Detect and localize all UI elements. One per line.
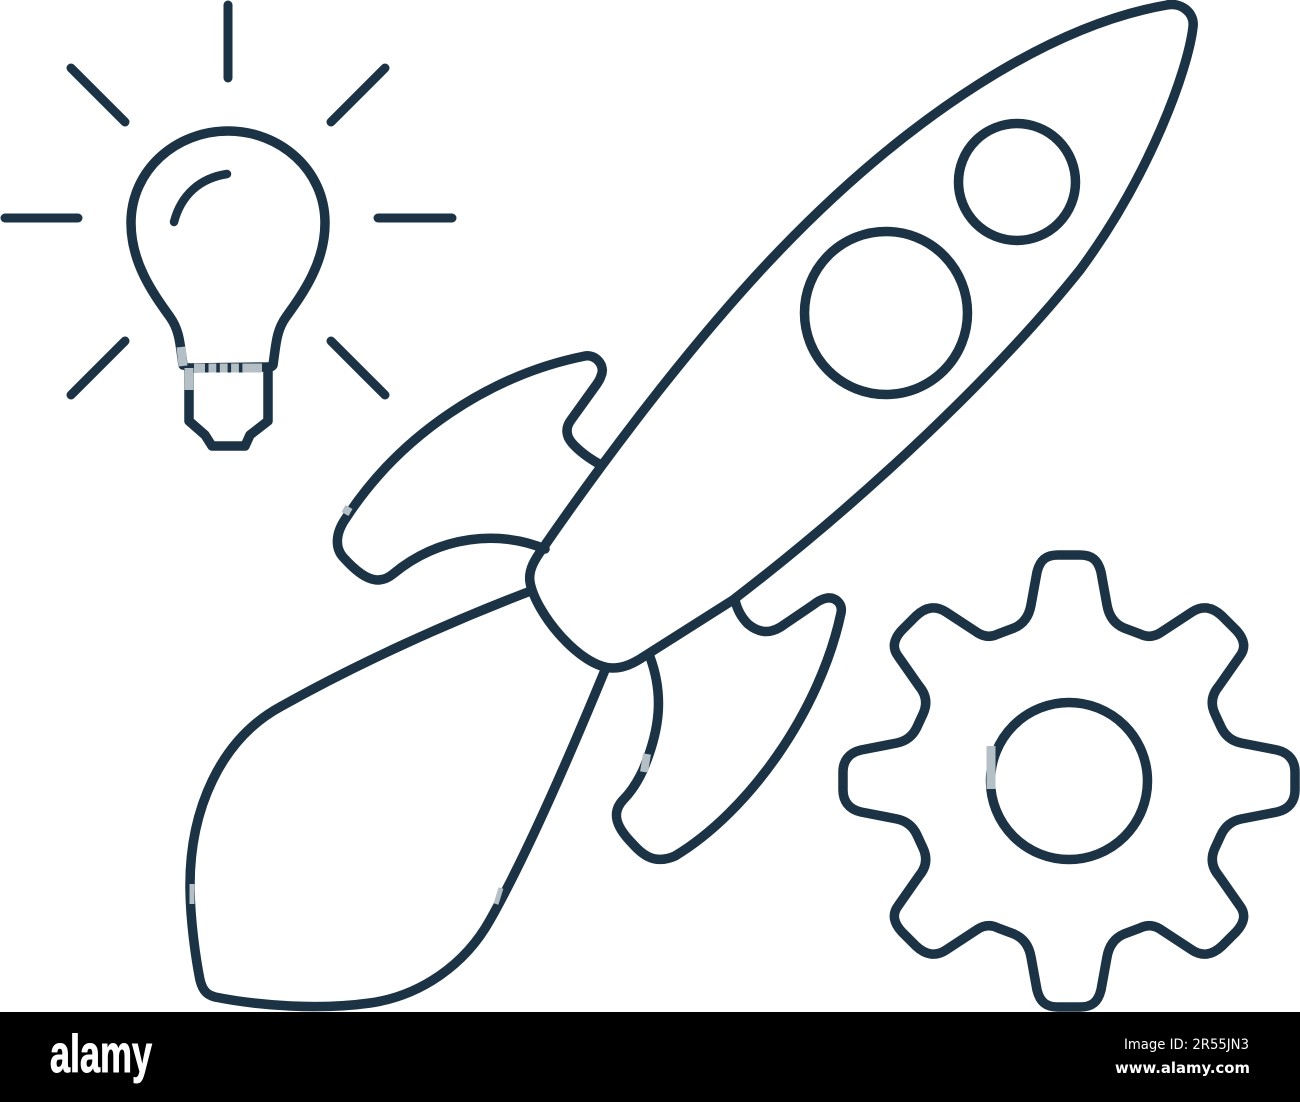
icon: rocket large window: [804, 232, 968, 394]
website: www.alamy.com: [1115, 1059, 1250, 1077]
icon: rocket small window: [958, 124, 1076, 240]
footer band: [0, 1012, 1300, 1102]
logo: alamy: [50, 1025, 152, 1084]
gear centre hole: [990, 702, 1148, 860]
icon: gear: [843, 555, 1295, 1007]
bulb highlight: [174, 174, 227, 222]
faint watermark traces on the strokes: [181, 347, 991, 904]
icon: rocket flame: [190, 592, 605, 1007]
bulb rays: [5, 5, 452, 395]
image id: Image ID: 2R55JN3: [1124, 1037, 1249, 1053]
icon: rocket left fin: [337, 356, 602, 580]
icon: light bulb with rays: [5, 5, 452, 446]
icon: rocket body: [530, 4, 1193, 668]
bulb base: [189, 368, 268, 446]
gear teeth outline: [843, 555, 1295, 1007]
bulb glass: [131, 131, 325, 368]
icon: rocket right fin: [616, 598, 841, 859]
